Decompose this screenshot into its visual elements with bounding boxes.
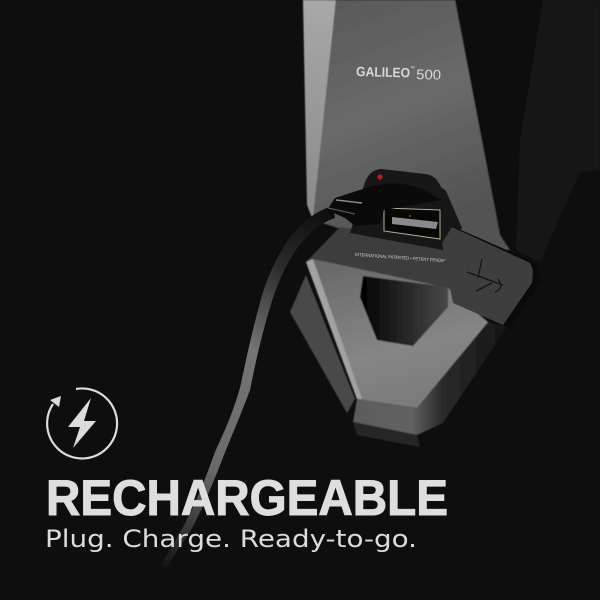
product: base with handle (290, 227, 507, 447)
product: USB port (350, 169, 462, 250)
product label: GALILEO 500: GALILEO (356, 64, 410, 80)
product label: GALILEO 500 (356, 64, 442, 83)
subheading: Plug. Charge. Ready-to-go. (45, 525, 417, 553)
product: patent text: INTERNATIONAL PATENTED • PETENT PENDIP (355, 252, 445, 263)
product: USB rubber flap (442, 226, 541, 328)
product label: GALILEO 500: 500 (416, 66, 442, 83)
icon: rechargeable lightning bolt (47, 388, 117, 458)
heading: RECHARGEABLE (46, 470, 448, 526)
product: charging cable (160, 183, 442, 568)
product label: GALILEO 500: ™ (410, 66, 415, 72)
product: lantern tower (303, 0, 600, 262)
